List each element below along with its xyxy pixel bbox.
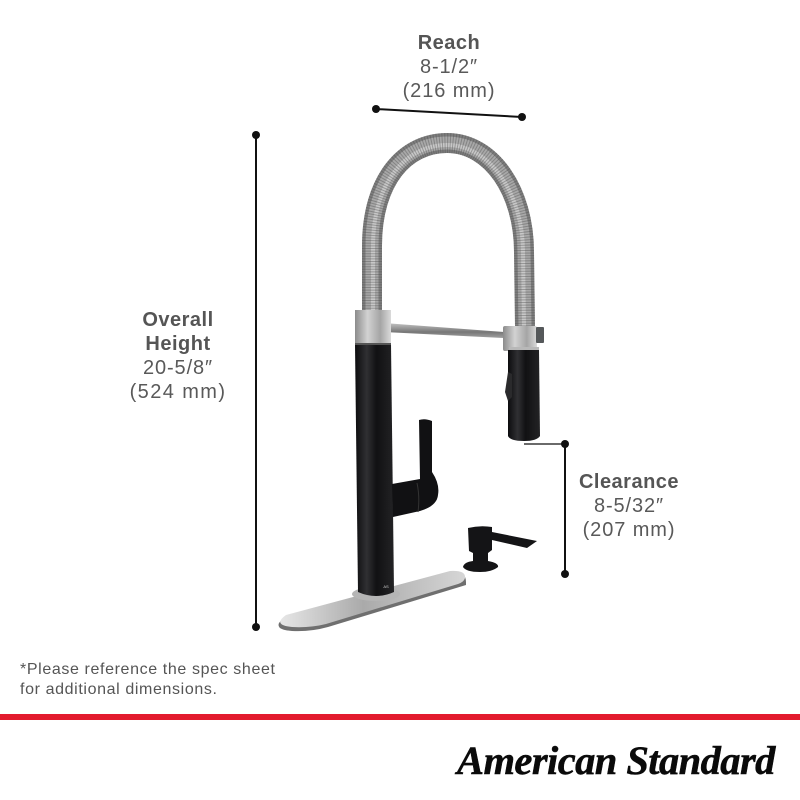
label: reach bbox=[403, 32, 495, 102]
label: overall height: Overall bbox=[142, 309, 214, 331]
label: reach: Reach bbox=[418, 32, 480, 54]
label: reach: (216 mm) bbox=[403, 80, 495, 102]
label: reach: 8-1/2″ bbox=[420, 56, 478, 78]
label: clearance: Clearance bbox=[579, 471, 679, 493]
label: overall height bbox=[130, 309, 226, 403]
spring hose bbox=[372, 143, 525, 326]
deck plate bbox=[279, 571, 466, 631]
label: clearance: (207 mm) bbox=[583, 519, 675, 541]
spray head bbox=[503, 326, 544, 441]
brand logo: American Standard bbox=[457, 738, 775, 783]
footnote: *Please reference the spec sheet bbox=[20, 661, 276, 678]
soap dispenser bbox=[463, 526, 537, 572]
label: overall height: (524 mm) bbox=[130, 381, 226, 403]
label: overall height: Height bbox=[145, 333, 211, 355]
footnote: for additional dimensions. bbox=[20, 681, 218, 698]
footnote bbox=[20, 661, 276, 698]
label: clearance bbox=[579, 471, 679, 541]
faucet body bbox=[355, 310, 394, 596]
red divider band bbox=[0, 714, 800, 720]
label: clearance: 8-5/32″ bbox=[594, 495, 664, 517]
handle bbox=[392, 419, 438, 517]
faucet body: AS bbox=[383, 584, 389, 589]
pull-down bar bbox=[384, 323, 504, 338]
label: overall height: 20-5/8″ bbox=[143, 357, 213, 379]
